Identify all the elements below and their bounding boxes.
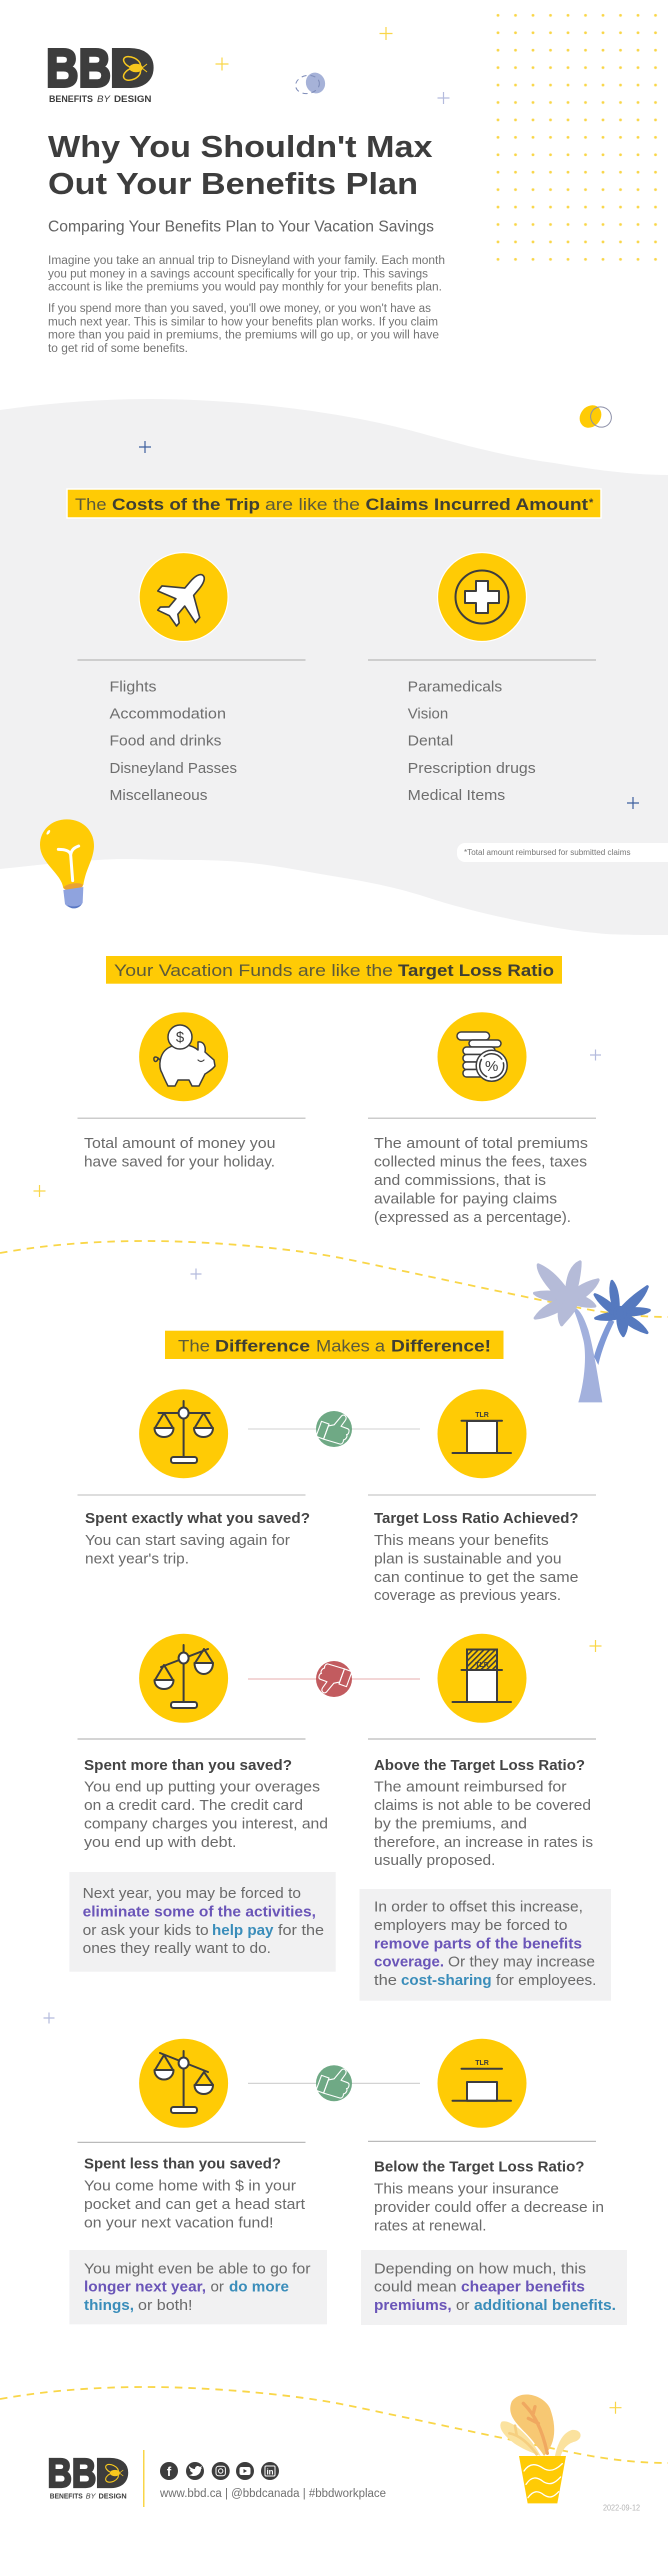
- callout: next year activities: for the: [278, 1923, 324, 1939]
- list: claims: [408, 679, 536, 804]
- background: grey wave panel: [0, 399, 668, 935]
- callout: cheaper premiums: cheaper benefits: [461, 2280, 585, 2296]
- subtitle: Comparing Your Benefits Plan to Your Vacation Savings: [48, 219, 434, 236]
- icon: TLR below: TLR: [475, 2060, 489, 2067]
- intro text block: [48, 255, 445, 355]
- callout: offset the increase: for employees.: [496, 1973, 596, 1989]
- text: target loss ratio description: and commissions, that is: [374, 1173, 546, 1189]
- text: vacation funds description: Total amount of money you: [84, 1136, 276, 1152]
- callout: next year activities: ones they really want to do.: [83, 1941, 271, 1957]
- text: below target loss ratio: Below the Target Loss Ratio?: [374, 2160, 585, 2176]
- text: spent more: You end up putting your overages: [84, 1780, 320, 1796]
- text: spent exactly: Spent exactly what you saved?: [85, 1511, 310, 1527]
- callout: cheaper premiums: premiums,: [374, 2298, 452, 2314]
- callout: next year activities: help pay: [212, 1923, 274, 1939]
- text: above target loss ratio: The amount reimbursed for: [374, 1780, 567, 1796]
- text: spent less: on your next vacation fund!: [84, 2215, 274, 2231]
- text: target loss ratio description: collected minus the fees, taxes: [374, 1154, 587, 1170]
- icon: TLR exceeded: TLR: [475, 1662, 489, 1669]
- heading banner: the difference: Makes a: [316, 1337, 386, 1356]
- text: below target loss ratio: [374, 2160, 604, 2235]
- icon: yellow egg with outline: [575, 401, 615, 432]
- connector with thumbs up: [248, 2063, 420, 2101]
- text: below target loss ratio: rates at renewal.: [374, 2219, 486, 2235]
- callout: cheaper premiums: additional benefits.: [474, 2298, 616, 2314]
- connector with thumbs down: [248, 1661, 420, 1699]
- intro text block: account is like the premiums you would pay monthly for your benefits plan.: [48, 282, 442, 294]
- date stamp: 2022-09-12: [603, 2504, 640, 2513]
- logo: Benefits By Design: BB: [46, 39, 111, 99]
- intro text block: to get rid of some benefits.: [48, 343, 188, 355]
- icon: palm trees: [535, 1262, 649, 1402]
- panel: row 2 spent more: [69, 1634, 611, 2001]
- text: spent more: [84, 1758, 328, 1851]
- text: below target loss ratio: This means your insurance: [374, 2182, 559, 2198]
- icon: medical cross: [438, 552, 526, 642]
- list: trip costs: Flights: [110, 679, 156, 696]
- text: vacation funds description: [84, 1136, 276, 1171]
- text: spent more: on a credit card. The credit card: [84, 1798, 303, 1814]
- logo: Benefits By Design: BY: [97, 94, 111, 105]
- footnote pill: *Total amount reimbursed for submitted claims: [464, 848, 630, 857]
- panel: target loss ratio column: [368, 1012, 596, 1226]
- text: spent less: Spent less than you saved?: [84, 2156, 281, 2172]
- logo: Benefits By Design: DESIGN: [114, 94, 152, 105]
- text: target loss ratio description: [374, 1136, 588, 1226]
- text: spent exactly: next year's trip.: [85, 1551, 189, 1567]
- intro text block: much next year. This is similar to how your benefits plan works. If you claim: [48, 316, 438, 328]
- icon: scale tipping right: [139, 2039, 228, 2128]
- callout: offset the increase: Or they may increase: [448, 1955, 595, 1971]
- callout: offset the increase: cost-sharing: [401, 1973, 492, 1989]
- list: claims: Paramedicals: [408, 679, 502, 696]
- callout: offset the increase: the: [374, 1973, 397, 1989]
- panel: vacation funds column: [78, 1012, 306, 1171]
- list: trip costs: Miscellaneous: [110, 787, 208, 804]
- callout: go for longer: or: [210, 2280, 224, 2296]
- text: target loss ratio description: available for paying claims: [374, 1192, 557, 1208]
- heading banner: costs of the trip: are like the: [265, 495, 360, 514]
- icon: TLR achieved: [438, 1389, 526, 1478]
- icon: TLR achieved: TLR: [475, 1412, 489, 1419]
- icon: coins with percent: [438, 1012, 526, 1101]
- callout: offset the increase: coverage.: [374, 1955, 444, 1971]
- text: vacation funds description: have saved for your holiday.: [84, 1155, 275, 1171]
- icon: coins with percent: %: [485, 1058, 498, 1075]
- callout: go for longer: You might even be able to go for: [84, 2261, 311, 2277]
- text: target loss ratio achieved: This means your benefits: [374, 1533, 549, 1549]
- callout: offset the increase: [360, 1889, 611, 2001]
- text: above target loss ratio: claims is not able to be covered: [374, 1798, 591, 1814]
- decorative dot grid: [489, 7, 664, 268]
- dashed wave divider: [0, 2387, 668, 2463]
- logo: Benefits By Design: BENEFITS: [49, 94, 93, 105]
- text: target loss ratio description: The amount of total premiums: [374, 1136, 588, 1152]
- icon: TLR below: [438, 2039, 526, 2128]
- text: spent less: [84, 2156, 305, 2231]
- callout: next year activities: [69, 1872, 336, 1972]
- intro text block: you put money in a savings account specifically for your trip. This savings: [48, 268, 428, 280]
- icon: balanced scale: [139, 1389, 228, 1478]
- icon: linkedin: in: [266, 2468, 274, 2476]
- callout: offset the increase: remove parts of the benefits: [374, 1936, 582, 1952]
- icon: scale tipping left: [139, 1634, 228, 1723]
- text: below target loss ratio: provider could offer a decrease in: [374, 2200, 604, 2216]
- heading banner: costs of the trip: *: [589, 497, 594, 509]
- footer logo: BENEFITS: [50, 2492, 83, 2501]
- icon: bee: [122, 54, 147, 83]
- heading banner: costs of the trip: Costs of the Trip: [112, 495, 260, 514]
- text: spent less: You come home with $ in your: [84, 2178, 296, 2194]
- callout: cheaper premiums: or: [456, 2298, 470, 2314]
- callout: cheaper premiums: [361, 2250, 627, 2325]
- icon: twitter: [186, 2462, 204, 2480]
- callout: go for longer: things,: [84, 2298, 134, 2314]
- intro text block: more than you paid in premiums, the premiums will go up, or you will have: [48, 330, 439, 342]
- icon: lightbulb: [40, 819, 94, 908]
- footer logo: DESIGN: [98, 2492, 127, 2501]
- social icons: [160, 2462, 279, 2480]
- footer logo: D: [95, 2450, 129, 2496]
- icon: instagram: [212, 2462, 230, 2480]
- list: claims: Vision: [408, 706, 448, 723]
- callout: go for longer: longer next year,: [84, 2280, 206, 2296]
- text: target loss ratio achieved: can continue to get the same: [374, 1570, 578, 1586]
- heading banner: the difference: The: [178, 1337, 210, 1356]
- connector with thumbs up: [248, 1409, 420, 1447]
- title: Why You Shouldn't Max: [48, 129, 433, 164]
- heading banner: the difference: Difference: [215, 1337, 310, 1356]
- dashed wave divider: [0, 1241, 668, 1317]
- callout: offset the increase: In order to offset this increase,: [374, 1899, 583, 1915]
- callout: go for longer: [69, 2250, 327, 2324]
- text: target loss ratio description: (expressed as a percentage).: [374, 1210, 571, 1226]
- callout: cheaper premiums: could mean: [374, 2280, 457, 2296]
- callout: next year activities: or ask your kids to: [83, 1923, 209, 1939]
- heading banner: costs of the trip: [67, 489, 601, 518]
- callout: offset the increase: employers may be forced to: [374, 1918, 568, 1934]
- heading banner: vacation funds: Your Vacation Funds are like the: [114, 961, 393, 980]
- footer contact text: www.bbd.ca | @bbdcanada | #bbdworkplace: [159, 2488, 386, 2500]
- title: [48, 129, 433, 201]
- callout: next year activities: Next year, you may be forced to: [83, 1886, 301, 1902]
- text: above target loss ratio: therefore, an increase in rates is: [374, 1835, 593, 1851]
- logo: Benefits By Design: [46, 39, 154, 105]
- panel: claims column: [368, 552, 596, 804]
- heading banner: the difference: Difference!: [391, 1337, 491, 1356]
- text: target loss ratio achieved: plan is sustainable and you: [374, 1552, 562, 1568]
- logo: Benefits By Design: D: [110, 39, 154, 99]
- text: above target loss ratio: usually proposed.: [374, 1853, 496, 1869]
- text: spent less: pocket and can get a head start: [84, 2197, 305, 2213]
- text: above target loss ratio: by the premiums, and: [374, 1817, 527, 1833]
- text: target loss ratio achieved: [374, 1511, 579, 1604]
- intro text block: If you spend more than you saved, you'll owe money, or you won't have as: [48, 303, 431, 315]
- text: target loss ratio achieved: Target Loss Ratio Achieved?: [374, 1511, 579, 1527]
- text: spent more: you end up with debt.: [84, 1835, 236, 1851]
- list: claims: Medical Items: [408, 787, 505, 804]
- icon: piggy bank: $: [176, 1029, 185, 1046]
- text: above target loss ratio: [374, 1758, 593, 1869]
- panel: row 3 spent less: [69, 2039, 627, 2325]
- heading banner: the difference: [165, 1331, 504, 1359]
- icon: youtube: [236, 2462, 254, 2480]
- footer logo: BB: [48, 2450, 96, 2496]
- intro text block: Imagine you take an annual trip to Disneyland with your family. Each month: [48, 255, 445, 267]
- footer logo: [48, 2450, 129, 2500]
- callout: next year activities: eliminate some of the activities,: [83, 1905, 316, 1921]
- text: spent exactly: [85, 1511, 310, 1567]
- list: trip costs: Disneyland Passes: [110, 760, 237, 777]
- heading banner: vacation funds: Target Loss Ratio: [398, 961, 554, 980]
- callout: go for longer: or both!: [138, 2298, 192, 2314]
- text: target loss ratio achieved: coverage as previous years.: [374, 1588, 561, 1604]
- icon: facebook: f: [167, 2464, 172, 2479]
- text: spent more: company charges you interest, and: [84, 1817, 328, 1833]
- icon: TLR exceeded: [438, 1634, 526, 1723]
- text: spent exactly: You can start saving again for: [85, 1533, 290, 1549]
- heading banner: costs of the trip: Claims Incurred Amount: [366, 495, 588, 514]
- title: Out Your Benefits Plan: [48, 166, 418, 201]
- text: spent more: Spent more than you saved?: [84, 1758, 292, 1774]
- callout: go for longer: do more: [229, 2280, 289, 2296]
- text: above target loss ratio: Above the Target Loss Ratio?: [374, 1758, 585, 1774]
- list: trip costs: [110, 679, 237, 804]
- footnote pill: [457, 843, 668, 862]
- panel: row 1 spent exactly: [78, 1389, 596, 1604]
- footer logo: BY: [86, 2492, 97, 2501]
- callout: cheaper premiums: Depending on how much, this: [374, 2261, 586, 2277]
- panel: trip costs column: [78, 552, 306, 804]
- list: trip costs: Food and drinks: [110, 733, 222, 750]
- heading banner: vacation funds: [106, 956, 562, 984]
- list: claims: Dental: [408, 733, 453, 750]
- heading banner: costs of the trip: The: [75, 495, 106, 514]
- list: claims: Prescription drugs: [408, 760, 536, 777]
- icon: airplane: [139, 552, 228, 642]
- icon: lavender egg with dashed outline: [294, 70, 328, 96]
- list: trip costs: Accommodation: [110, 706, 226, 723]
- icon: potted plant: [500, 2395, 581, 2503]
- icon: piggy bank: [139, 1012, 228, 1101]
